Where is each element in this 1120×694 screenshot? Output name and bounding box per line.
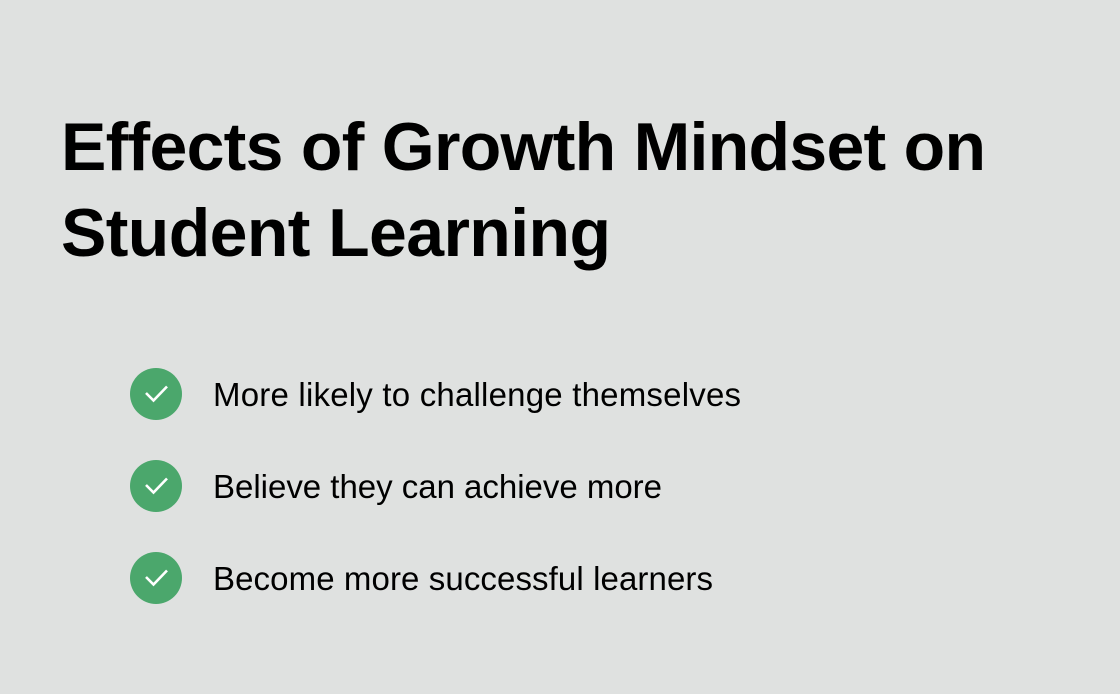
- item text: Become more successful learners: [213, 560, 713, 597]
- item text: More likely to challenge themselves: [213, 376, 741, 413]
- title: Effects of Growth Mindset on: [61, 109, 986, 185]
- icon: green check: [130, 552, 182, 604]
- list item: achieve more: [130, 460, 662, 512]
- item text: Believe they can achieve more: [213, 468, 662, 505]
- title: Student Learning: [61, 195, 611, 271]
- title: [61, 109, 986, 271]
- icon: green check: [130, 460, 182, 512]
- icon: green check: [130, 368, 182, 420]
- list item: successful learners: [130, 552, 713, 604]
- list item: challenge themselves: [130, 368, 741, 420]
